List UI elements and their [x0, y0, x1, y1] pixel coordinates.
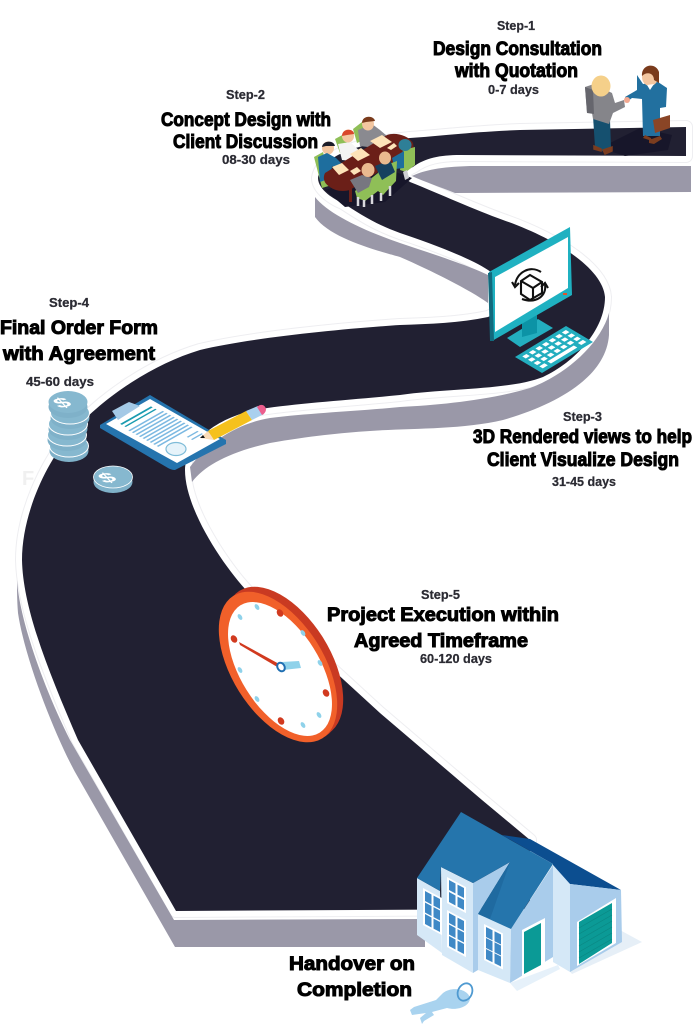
main roof: [417, 812, 553, 929]
hour hand: [282, 661, 301, 670]
icon: computer monitor and keyboard: [488, 227, 593, 373]
monitor frame: [489, 227, 572, 341]
shadow under table: [325, 170, 412, 207]
step 1 text: 0-7 days: [488, 83, 539, 97]
step 4 text: Final Order Form: [0, 318, 158, 339]
handover text: Handover on: [289, 954, 415, 975]
power light: [563, 293, 567, 295]
window: gable: [484, 924, 503, 970]
icon: wall clock: [194, 566, 368, 763]
clipboard clip: [112, 402, 140, 420]
step 4 text: with Agreement: [2, 344, 156, 365]
clock centre: [276, 661, 286, 673]
step 1 text: with Quotation: [454, 61, 578, 82]
step 5 text: Agreed Timeframe: [354, 631, 528, 652]
stamp seal: [166, 442, 186, 456]
icon: rotating 3D box: [512, 269, 548, 301]
icon: clipboard with agreement: [100, 395, 266, 470]
step 5 text: [327, 587, 559, 666]
front step: [510, 965, 560, 991]
papers on table: [332, 135, 397, 175]
clipboard paper: [106, 399, 220, 463]
roof valley shading: [478, 862, 510, 919]
handover text: Completion: [297, 980, 412, 1001]
keyboard: [515, 326, 593, 373]
side wall: left and bottom: [17, 580, 425, 947]
icon: handshake between two businessmen: [585, 66, 672, 156]
clipboard board: [100, 395, 226, 470]
monitor stand: [522, 315, 537, 337]
step 5 text: 60-120 days: [420, 652, 492, 666]
garage door: [577, 898, 616, 966]
pencil: [200, 405, 266, 440]
side wall: top straight: [412, 166, 691, 193]
icon: meeting table with team: [314, 117, 415, 207]
clock bezel: [194, 571, 362, 763]
road: faint outer edge of white border: [22, 127, 686, 911]
rear roof: [502, 835, 621, 890]
clock rim: [200, 566, 368, 758]
step 2 text: 08-30 days: [222, 153, 290, 167]
table top: [324, 134, 414, 191]
hour marks red: [229, 608, 331, 726]
agreement text lines: [118, 405, 204, 453]
step 3 text: [473, 409, 692, 489]
person: white shirt, red hair: [338, 130, 364, 161]
handover text: [289, 954, 415, 1001]
road: white border: [22, 127, 686, 911]
monitor base: [507, 319, 553, 347]
icon: coin stack: $: [48, 394, 76, 411]
side wall: second band: [315, 197, 488, 303]
step 1 text: [433, 18, 602, 97]
ground shadow: [560, 929, 642, 974]
side wall: right bend: [190, 313, 609, 482]
step 2 text: [161, 87, 331, 167]
front door: [522, 918, 545, 977]
step 2 text: Step-2: [226, 87, 265, 102]
step 5 text: Step-5: [421, 587, 460, 602]
step 2 text: Concept Design with: [161, 110, 331, 131]
road side walls: [17, 166, 691, 947]
watermark mark: F: [22, 468, 34, 490]
step 1 text: Step-1: [497, 18, 535, 33]
monitor edge: [488, 272, 494, 341]
icon: coin stack: [48, 391, 90, 462]
icon: single coin: [93, 466, 132, 493]
figure: client back view: [585, 76, 625, 154]
clock face: [207, 584, 353, 754]
walls: [417, 862, 622, 983]
person: blue suit: [318, 142, 345, 182]
shadow under figures: [600, 128, 672, 156]
step 3 text: Step-3: [563, 409, 602, 424]
step 5 text: Project Execution within: [327, 605, 559, 626]
road surface: [22, 127, 686, 911]
window: left wing: [423, 888, 442, 935]
icon: house keys: [410, 981, 475, 1024]
person: front, grey suit, green chair: [350, 163, 378, 207]
step 3 text: Client Visualize Design: [487, 450, 679, 471]
person: front middle, dark suit, green chair: [375, 152, 397, 201]
hour marks blue: [237, 603, 323, 729]
step 1 text: Design Consultation: [433, 39, 602, 60]
step 4 text: [0, 295, 158, 389]
monitor screen: [495, 237, 568, 332]
garage door slats: [579, 909, 612, 958]
step 4 text: Step-4: [49, 295, 90, 310]
step 2 text: Client Discussion: [173, 132, 318, 153]
figure: consultant in blue suit: [624, 66, 670, 144]
step 3 text: 31-45 days: [552, 475, 616, 489]
window: bay lower: [447, 910, 466, 957]
icon: single coin: $: [93, 469, 121, 486]
window: bay upper: [447, 877, 466, 913]
person: grey suit: [358, 117, 387, 147]
minute hand: [239, 642, 281, 668]
keyboard keys: [522, 330, 586, 368]
step 4 text: 45-60 days: [26, 375, 94, 389]
chairs back row: [314, 122, 368, 188]
person: front right, teal hair, green chair: [392, 139, 415, 180]
icon: house: [417, 812, 642, 991]
